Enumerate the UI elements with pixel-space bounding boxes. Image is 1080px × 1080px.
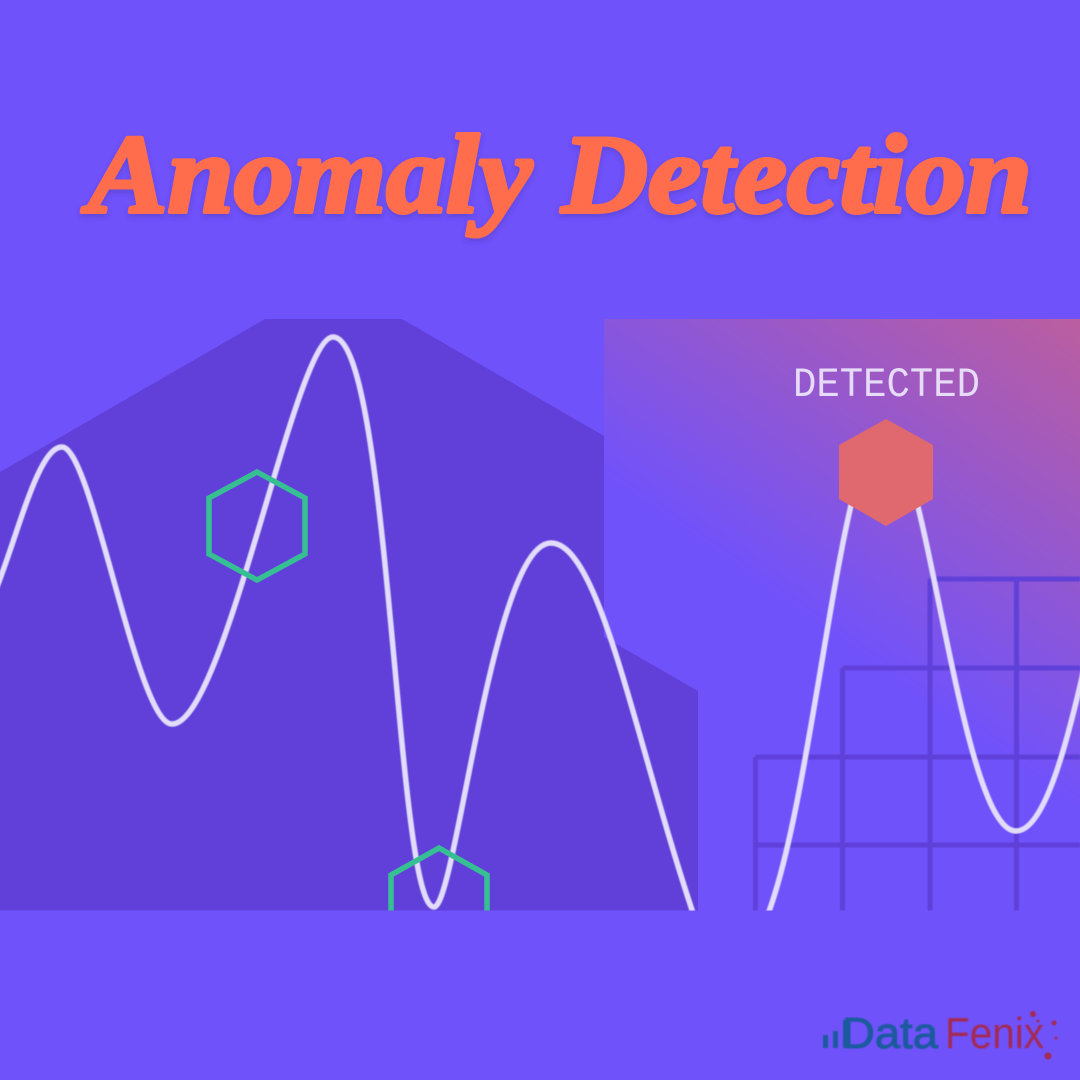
dark mountain background <box>0 319 698 911</box>
icon: logo dots <box>1030 1011 1058 1060</box>
panel: detected anomaly <box>604 319 1080 914</box>
signal wave line <box>0 337 694 916</box>
detected label: DETECTED <box>793 361 980 409</box>
title: Anomaly Detection <box>82 113 1032 237</box>
logo: DataFenix <box>823 1009 1058 1060</box>
stepped grid <box>756 579 1080 911</box>
panel: normal signal chart <box>0 319 698 958</box>
logo wordmark: Fenix: Fenix <box>945 1009 1044 1058</box>
logo wordmark: Data: Data <box>842 1009 939 1058</box>
icon: green hexagon on rising slope <box>209 472 305 580</box>
icon: logo bars <box>823 1020 847 1048</box>
icon: red anomaly hexagon <box>839 419 933 526</box>
signal wave line with spike <box>766 504 1080 910</box>
icon: green hexagon at trough <box>388 845 490 910</box>
gradient panel background <box>604 319 1080 768</box>
